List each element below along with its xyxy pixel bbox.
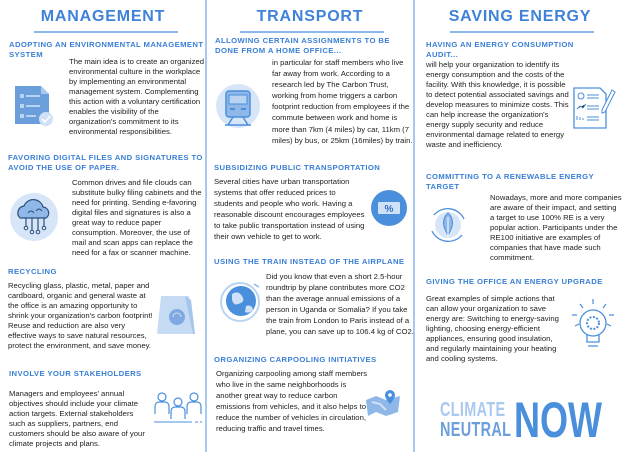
heading: energy audit: HAVING AN ENERGY CONSUMPTION AUDIT... bbox=[426, 40, 574, 59]
icon: leaf cycle bbox=[432, 208, 464, 242]
icon: map pin bbox=[366, 390, 400, 416]
text: renewable energy: Nowadays, more and more companies are aware of their impact, and setting a target to use 100% RE is a very popular action. Participants under the RE100 initiative are examples of companies that have made such commitment. bbox=[490, 193, 622, 262]
icon: discount ticket: % bbox=[385, 204, 394, 215]
text: home office: in particular for staff members who live far away from work. According to a research led by The Carbon Trust, working from home triggers a carbon footprint reduction from employees if the commute between work and home is more than 7km (4 miles) by car, 11km (7 miles) by bus, or 25km (16miles) by train. bbox=[272, 58, 413, 145]
title: saving energy: SAVING ENERGY bbox=[449, 8, 591, 25]
heading: environmental management system: ADOPTING AN ENVIRONMENTAL MANAGEMENT SYSTEM bbox=[9, 40, 203, 59]
icon: people group bbox=[154, 392, 202, 422]
heading: public transportation: SUBSIDIZING PUBLIC TRANSPORTATION bbox=[214, 163, 380, 172]
text: environmental management: The main idea is to create an organized environmental culture in the workplace by implementing an environmental management system. Complementing this action with a voluntary certification enables the visibility of the organization's commitment to its environmental responsibilities. bbox=[69, 57, 204, 136]
text: energy upgrade: Great examples of simple actions that can allow your organization to save energy are: Switching to energy-saving lighting, choosing energy-efficient appliances, ensuring good insulation, and regularly maintaining your heating and cooling systems. bbox=[426, 294, 559, 363]
heading: renewable energy: COMMITTING TO A RENEWABLE ENERGY TARGET bbox=[426, 172, 594, 191]
heading: recycling: RECYCLING bbox=[8, 267, 57, 276]
logo: climate neutral now: CLIMATE bbox=[440, 399, 505, 421]
icon: train bbox=[216, 84, 260, 128]
icon: discount ticket bbox=[371, 190, 407, 226]
text: train vs airplane: Did you know that even a short 2.5-hour roundtrip by plane contributes more CO2 than the average annual emissions of a person in Uganda or Somalia? If you take the train from London to Paris instead of a plane, you can save up to 106.4 kg of CO2. bbox=[266, 272, 414, 336]
heading: digital files: FAVORING DIGITAL FILES AND SIGNATURES TO AVOID THE USE OF PAPER. bbox=[8, 153, 203, 172]
text: energy audit: will help your organization to identify its energy consumption and the costs of the facility. With this knowledge, it is possible to detect potential associated savings and develop measures to minimize costs. This can help increase the organization's energy supply security and reduce environmental damage related to energy waste and inefficiency. bbox=[426, 60, 569, 149]
heading: home office: ALLOWING CERTAIN ASSIGNMENTS TO BE DONE FROM A HOME OFFICE... bbox=[215, 36, 390, 55]
icon: light bulb bbox=[572, 299, 614, 347]
rule bbox=[450, 31, 594, 32]
logo: climate neutral now: NOW bbox=[514, 392, 602, 448]
heading: energy upgrade: GIVING THE OFFICE AN ENERGY UPGRADE bbox=[426, 277, 603, 286]
title: transport: TRANSPORT bbox=[257, 8, 363, 25]
logo: climate neutral now bbox=[440, 392, 602, 448]
text: carpooling: Organizing carpooling among staff members who live in the same neighborhoods is another great way to reduce carbon emissions from vehicles, and it also helps to reduce the number of vehicles in circulation, reducing traffic and travel times. bbox=[216, 369, 367, 433]
icon: document with check bbox=[15, 86, 53, 126]
icon: recycling bag bbox=[157, 296, 195, 334]
text: stakeholders: Managers and employees' annual objectives should include your climate action targets. External stakeholders such as suppliers, partners, end customers should be also aware of your climate projects and plans. bbox=[9, 389, 145, 448]
icon: globe bbox=[220, 282, 260, 322]
title: management: MANAGEMENT bbox=[41, 8, 165, 25]
heading: stakeholders: INVOLVE YOUR STAKEHOLDERS bbox=[9, 369, 142, 378]
text: recycling: Recycling glass, plastic, metal, paper and cardboard, organic and general waste at the office is an amazing opportunity to shrink your organization's carbon footprint! Reuse and reduction are also very effective ways to save natural resources, protect the environment, and save money. bbox=[8, 281, 153, 350]
text: public transportation: Several cities have urban transportation systems that offer reduced prices to students and people who work. Having a reasonable discount encourages employees to take public transportation instead of using their own vehicle to get to work. bbox=[214, 177, 364, 241]
icon: cloud network bbox=[10, 193, 58, 241]
icon: audit document bbox=[573, 87, 616, 129]
logo: climate neutral now: NEUTRAL bbox=[440, 419, 511, 441]
text: digital files: Common drives and file clouds can substitute bulky filing cabinets and the need for printing. Sending e-favoring digital files and signatures is also a great way to reduce paper consumption. Moreover, the use of mail and scan apps can replace the need for a fax or scanner machine. bbox=[72, 178, 202, 257]
heading: train vs airplane: USING THE TRAIN INSTEAD OF THE AIRPLANE bbox=[214, 257, 404, 266]
heading: carpooling: ORGANIZING CARPOOLING INITIATIVES bbox=[214, 355, 377, 364]
